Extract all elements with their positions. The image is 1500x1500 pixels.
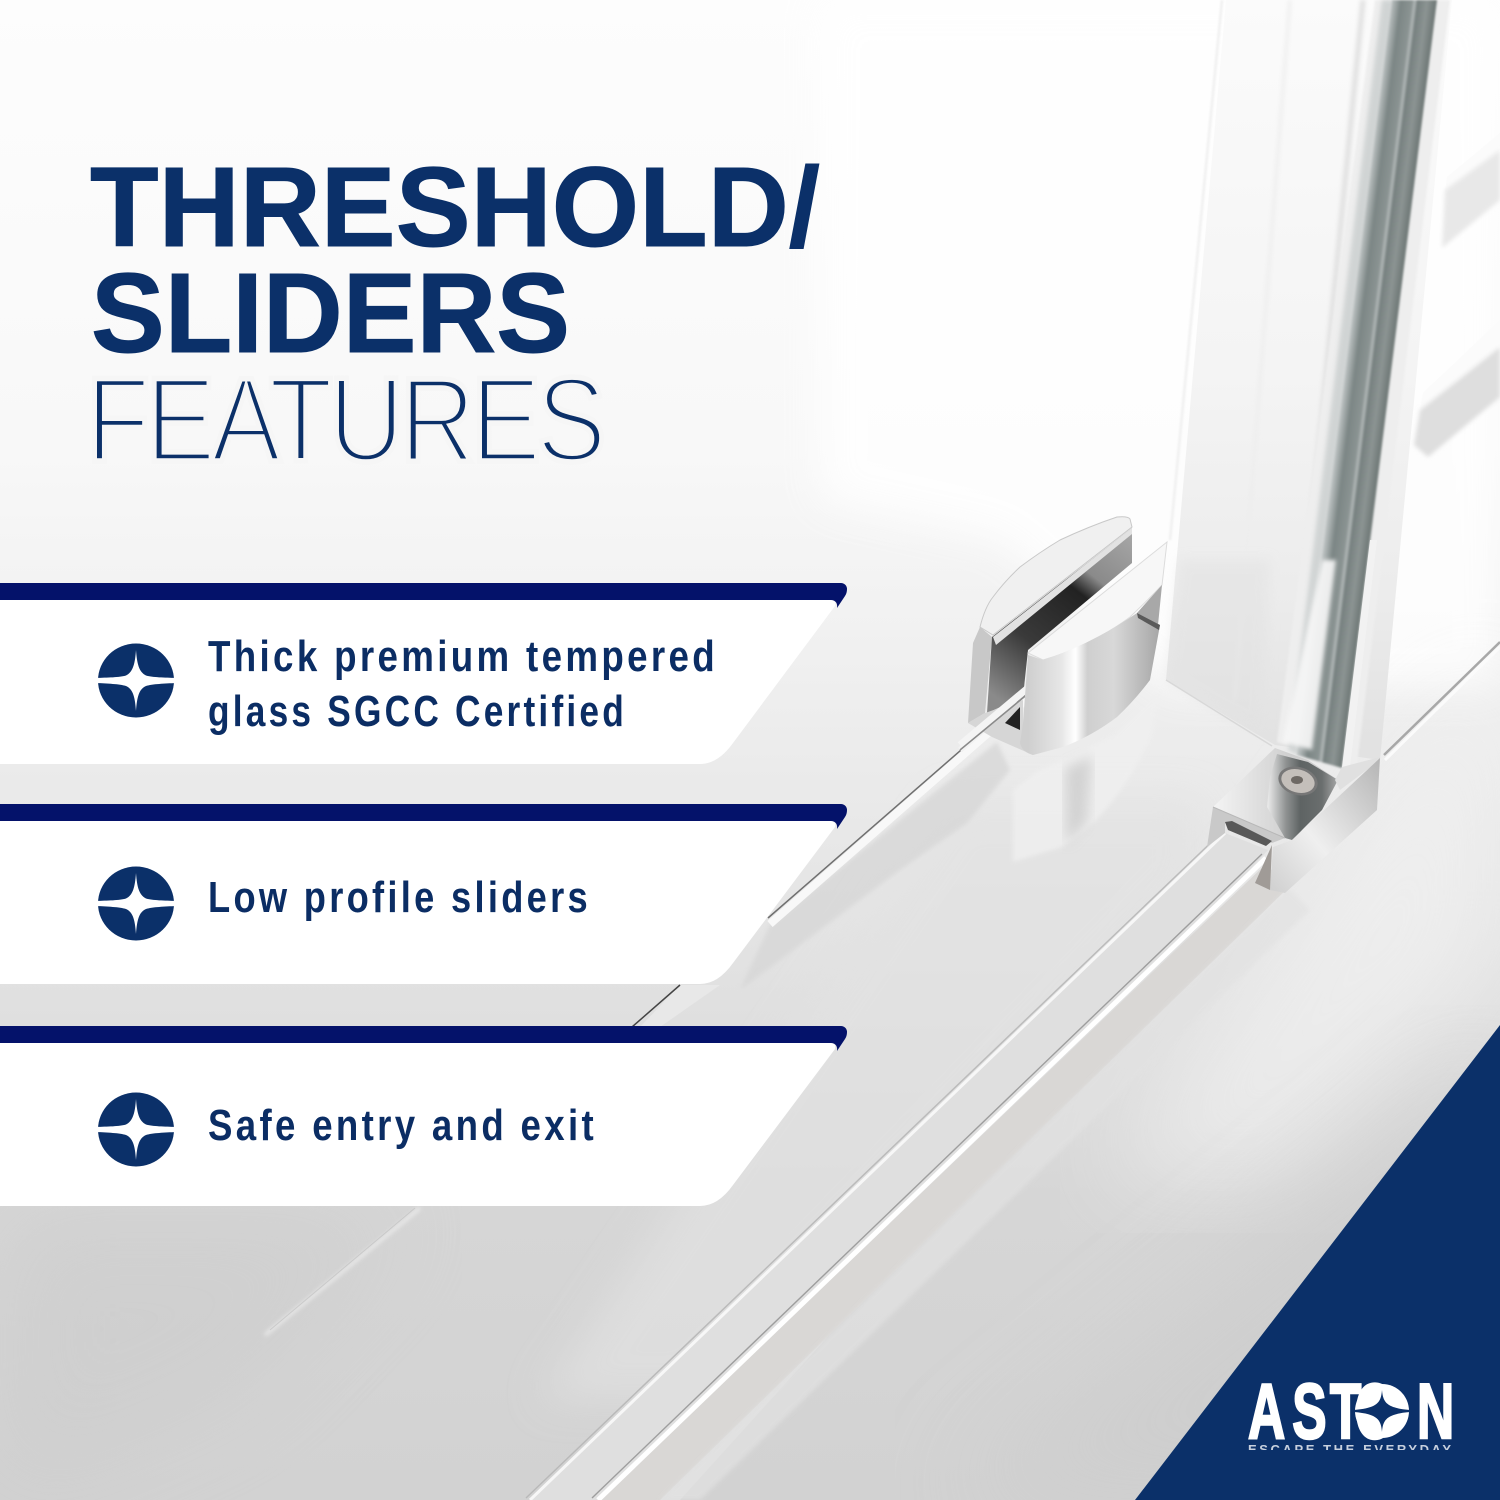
corner triangle <box>1135 1025 1500 1500</box>
title <box>86 144 820 487</box>
icon: star badge 1 <box>96 644 176 718</box>
bottom track: threshold rail <box>526 690 1310 1500</box>
panel: feature 2 sliders <box>0 804 847 984</box>
glass panel with vertical streaks <box>1166 0 1500 760</box>
feature text 1: Thick premium tempered <box>208 632 718 681</box>
icon: screw <box>1275 762 1321 800</box>
logo: Aston: ESCAPE THE EVERYDAY <box>1248 1442 1451 1457</box>
floor reflection of guide <box>1013 690 1160 862</box>
title: THRESHOLD/ <box>90 144 820 270</box>
panel: feature 3 safety <box>0 1026 847 1206</box>
title: FEATURES <box>86 353 602 487</box>
icon: star badge 2 <box>96 866 176 940</box>
feature text 1 <box>208 632 718 736</box>
feature text 2: Low profile sliders <box>208 873 591 922</box>
chrome slider bracket with screw <box>1207 748 1380 893</box>
feature text 1: glass SGCC Certified <box>208 687 627 736</box>
vertical chrome sliding bar <box>1277 0 1450 768</box>
logo: Aston: ASTON <box>1248 1368 1454 1456</box>
title: SLIDERS <box>91 250 570 376</box>
icon: star badge 3 <box>96 1092 176 1166</box>
feature text 3: Safe entry and exit <box>208 1101 597 1150</box>
chrome floor guide bracket <box>960 517 1167 755</box>
panel: feature 1 glass <box>0 583 847 764</box>
